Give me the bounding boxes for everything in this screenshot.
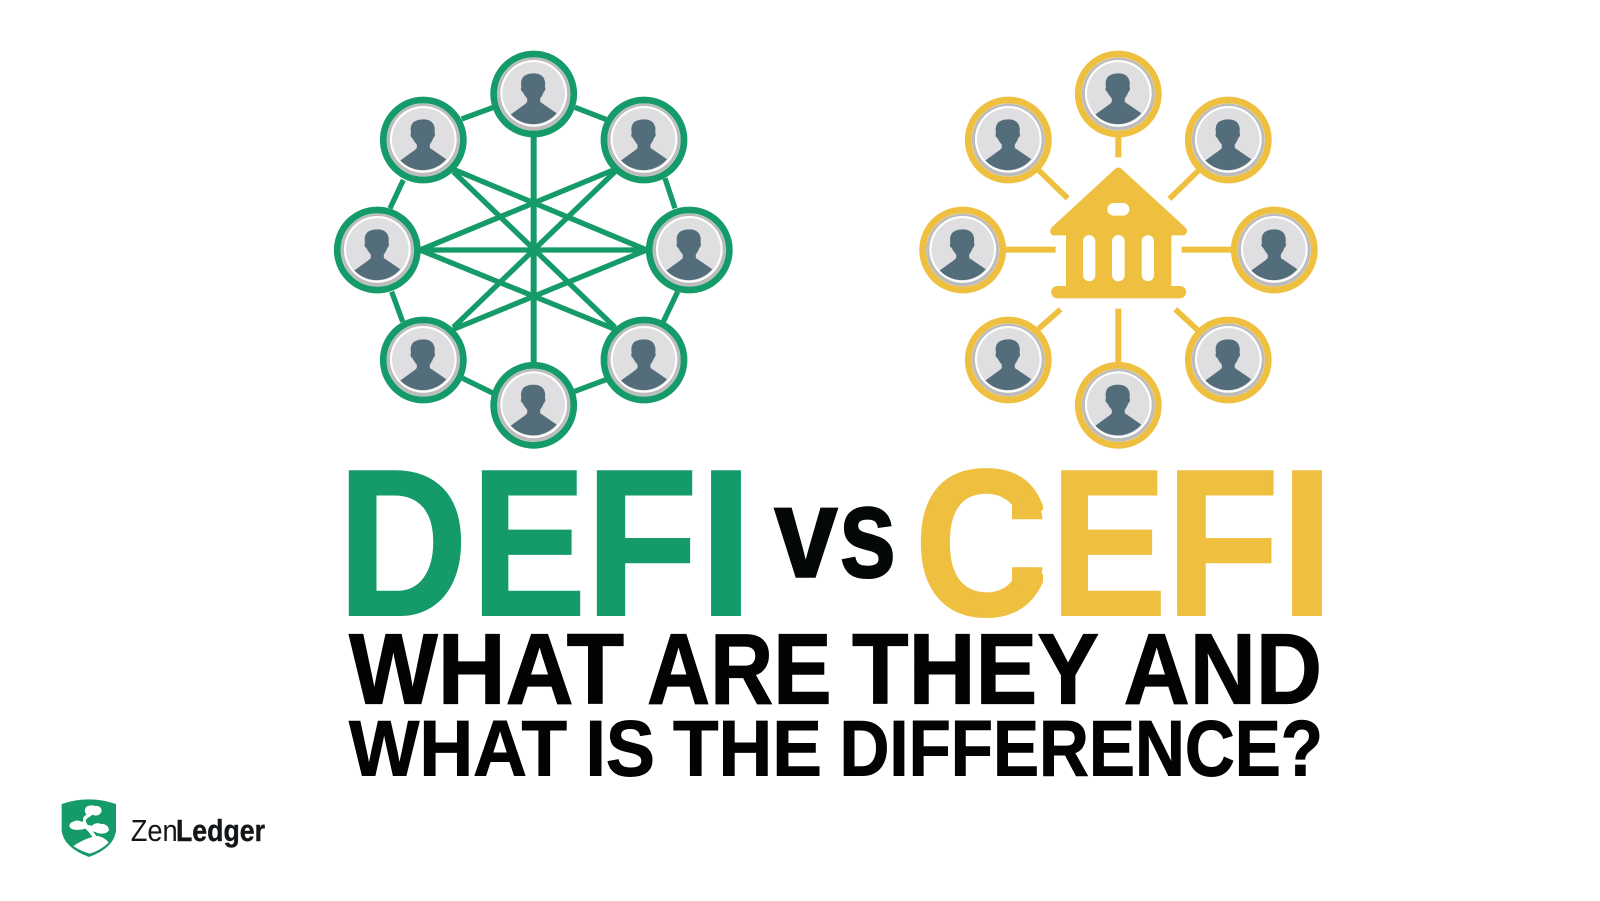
user node: bottom	[494, 365, 574, 445]
logo: ZenLedger	[62, 799, 265, 857]
subtitle line one	[349, 614, 1322, 726]
user node: right	[1234, 210, 1314, 290]
user node: upper right	[1188, 100, 1268, 180]
subtitle line two: IS	[586, 704, 655, 792]
subtitle line one: WHAT	[349, 614, 624, 726]
user node: upper right	[604, 100, 684, 180]
user node: top	[1078, 54, 1158, 134]
user node: lower right	[1188, 320, 1268, 400]
icon: bank building	[1050, 167, 1187, 298]
subtitle line two: WHAT	[349, 704, 567, 792]
title: vs	[774, 459, 896, 605]
user node: right	[649, 210, 729, 290]
icon: shield with bonsai tree	[62, 799, 116, 857]
wordmark: Zen	[131, 813, 178, 848]
user node: bottom	[1078, 365, 1158, 445]
subtitle line one: AND	[1124, 614, 1322, 726]
subtitle line one: THEY	[852, 614, 1099, 726]
title: DEFI: I	[699, 427, 753, 660]
title: CEFI: E	[1050, 427, 1167, 660]
diagram: DeFi decentralized network	[337, 54, 729, 445]
wordmark	[131, 813, 265, 848]
user node: left	[337, 210, 417, 290]
title: DEFI: F	[585, 427, 698, 660]
title: DEFI	[338, 427, 753, 660]
title: vs: s	[839, 459, 896, 605]
user node: top	[494, 54, 574, 134]
user node: upper left	[968, 100, 1048, 180]
title: vs: v	[774, 459, 838, 605]
user node: lower left	[383, 320, 463, 400]
title: CEFI: F	[1166, 427, 1280, 660]
subtitle line two: THE	[673, 704, 822, 792]
title: CEFI	[914, 427, 1334, 660]
wordmark: Ledger	[176, 813, 265, 848]
title: DEFI: D	[338, 427, 468, 660]
title: CEFI: C	[914, 427, 1050, 660]
subtitle line one: ARE	[647, 614, 832, 726]
subtitle line two	[349, 704, 1323, 792]
user node: lower right	[604, 320, 684, 400]
title: CEFI: I	[1280, 427, 1334, 660]
title: DEFI: E	[471, 427, 586, 660]
diagram: CeFi centralized network	[923, 54, 1314, 445]
subtitle line two: DIFFERENCE?	[840, 704, 1323, 792]
user node: lower left	[968, 320, 1048, 400]
network connection lines	[390, 107, 678, 393]
user node: left	[923, 210, 1003, 290]
user node: upper left	[383, 100, 463, 180]
spoke lines to the bank	[1006, 137, 1232, 363]
